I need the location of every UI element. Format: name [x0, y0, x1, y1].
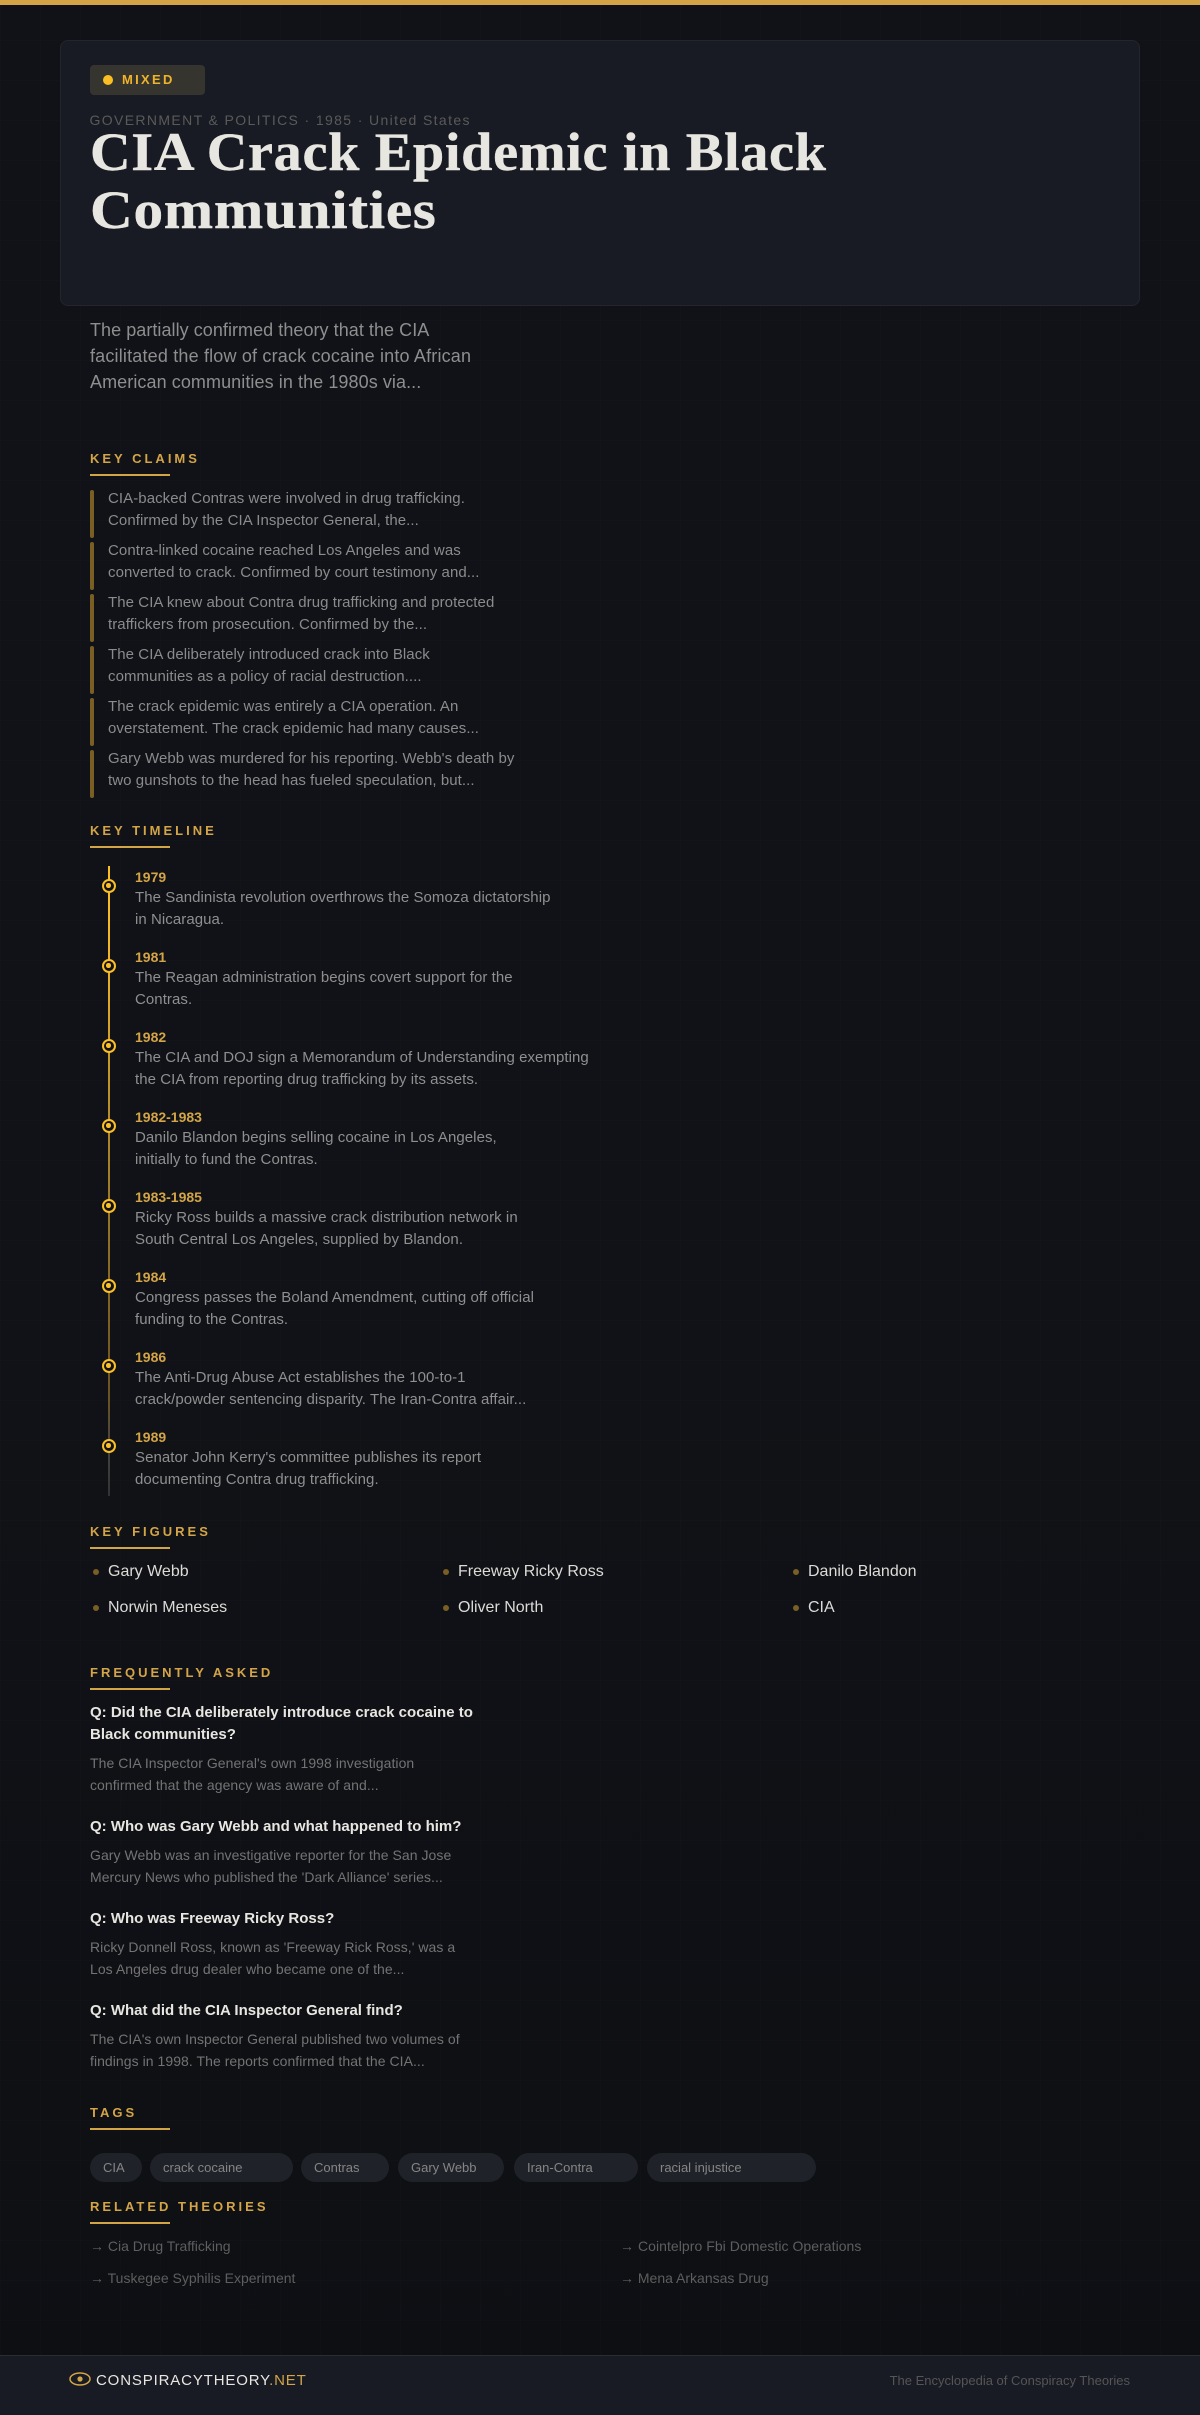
- claim 5: overstatement. The crack epidemic had many causes...: [108, 720, 479, 737]
- heading: related theories: RELATED THEORIES: [90, 2199, 268, 2214]
- year: 1982-1983: [135, 1109, 202, 1125]
- node marker: [102, 879, 116, 893]
- event text: [135, 1289, 534, 1328]
- node marker: [102, 1119, 116, 1133]
- link: Tuskegee Syphilis Experiment: → Tuskegee Syphilis Experiment: [90, 2270, 295, 2286]
- panel: key figures: [90, 1524, 917, 1616]
- event 1981: [102, 949, 513, 1008]
- claim 1: Confirmed by the CIA Inspector General, the...: [108, 512, 419, 529]
- event 1982: [102, 1029, 589, 1088]
- tag: Contras: [301, 2153, 389, 2182]
- top accent bar: [0, 0, 1200, 5]
- answer 3: [90, 1939, 456, 1977]
- answer 2: [90, 1847, 451, 1885]
- figure: Danilo Blandon: Danilo Blandon: [808, 1563, 917, 1580]
- claim 6: [90, 750, 514, 798]
- category and date line: GOVERNMENT & POLITICS · 1985 · United States: [90, 112, 471, 128]
- panel: frequently asked: [90, 1665, 473, 2069]
- question 2: Q: Who was Gary Webb and what happened to him?: [90, 1818, 461, 1835]
- event text: Congress passes the Boland Amendment, cutting off official: [135, 1289, 534, 1306]
- tag row: [90, 2153, 816, 2182]
- claim 3: traffickers from prosecution. Confirmed by the...: [108, 616, 427, 633]
- description: American communities in the 1980s via...: [90, 372, 421, 392]
- event 1979: [102, 869, 550, 928]
- claim 1: CIA-backed Contras were involved in drug trafficking.: [108, 490, 465, 507]
- footer: [0, 2355, 1200, 2415]
- claim 5: The crack epidemic was entirely a CIA operation. An: [108, 698, 458, 715]
- answer 2: Gary Webb was an investigative reporter for the San Jose: [90, 1847, 451, 1863]
- answer 1: confirmed that the agency was aware of and...: [90, 1777, 379, 1793]
- answer 4: [90, 2031, 460, 2069]
- tag: Gary Webb: Gary Webb: [411, 2160, 477, 2175]
- heading: frequently asked: FREQUENTLY ASKED: [90, 1665, 273, 1680]
- answer 3: Ricky Donnell Ross, known as 'Freeway Rick Ross,' was a: [90, 1939, 455, 1955]
- timeline axis line: [108, 866, 110, 1496]
- figure: Freeway Ricky Ross: Freeway Ricky Ross: [458, 1563, 604, 1580]
- link: Cia Drug Trafficking: → Cia Drug Trafficking: [90, 2238, 231, 2254]
- node marker: [102, 1199, 116, 1213]
- year: 1981: [135, 949, 166, 965]
- heading: tags: TAGS: [90, 2105, 137, 2120]
- claim 6: two gunshots to the head has fueled speculation, but...: [108, 772, 475, 789]
- tag: racial injustice: [647, 2153, 816, 2182]
- footer tagline: The Encyclopedia of Conspiracy Theories: [890, 2373, 1130, 2388]
- answer 2: Mercury News who published the 'Dark Alliance' series...: [90, 1869, 443, 1885]
- tag: CIA: [90, 2153, 142, 2182]
- event text: [135, 1369, 526, 1408]
- panel: hero header: [60, 40, 1140, 306]
- tag: Gary Webb: [398, 2153, 504, 2182]
- year: 1983-1985: [135, 1189, 202, 1205]
- tag: racial injustice: racial injustice: [660, 2160, 742, 2175]
- event text: in Nicaragua.: [135, 911, 224, 928]
- claim 3: The CIA knew about Contra drug trafficking and protected: [108, 594, 494, 611]
- figure: Norwin Meneses: Norwin Meneses: [108, 1599, 227, 1616]
- link: Mena Arkansas Drug: → Mena Arkansas Drug: [620, 2270, 769, 2286]
- title: [90, 122, 826, 240]
- claim 4: The CIA deliberately introduced crack into Black: [108, 646, 430, 663]
- heading: key claims: KEY CLAIMS: [90, 451, 200, 466]
- claim 5: [90, 698, 479, 746]
- event text: Contras.: [135, 991, 192, 1008]
- answer 4: The CIA's own Inspector General published two volumes of: [90, 2031, 460, 2047]
- tag: crack cocaine: crack cocaine: [163, 2160, 242, 2175]
- event text: The Reagan administration begins covert support for the: [135, 969, 513, 986]
- event text: The Anti-Drug Abuse Act establishes the 100-to-1: [135, 1369, 466, 1386]
- event text: Senator John Kerry's committee publishes its report: [135, 1449, 481, 1466]
- description: The partially confirmed theory that the CIA: [90, 320, 429, 340]
- event 1984: [102, 1269, 534, 1328]
- link: Cointelpro Fbi Domestic Operations: → Cointelpro Fbi Domestic Operations: [620, 2238, 861, 2254]
- answer 1: [90, 1755, 414, 1793]
- year: 1982: [135, 1029, 166, 1045]
- description: facilitated the flow of crack cocaine into African: [90, 346, 471, 366]
- brand name: CONSPIRACYTHEORY.NET: [96, 2372, 307, 2389]
- event text: The CIA and DOJ sign a Memorandum of Understanding exempting: [135, 1049, 589, 1066]
- tag: Contras: Contras: [314, 2160, 360, 2175]
- node marker: [102, 1279, 116, 1293]
- event text: crack/powder sentencing disparity. The Iran-Contra affair...: [135, 1391, 526, 1408]
- question 1: [90, 1704, 473, 1743]
- figure: Gary Webb: Gary Webb: [108, 1563, 189, 1580]
- heading: key figures: KEY FIGURES: [90, 1524, 211, 1539]
- year: 1989: [135, 1429, 166, 1445]
- event text: [135, 1049, 589, 1088]
- panel: related theories: [90, 2197, 990, 2289]
- node marker: [102, 1439, 116, 1453]
- event 1983-1985: [102, 1189, 518, 1248]
- event 1982-1983: [102, 1109, 497, 1168]
- event text: [135, 1129, 497, 1168]
- claim 4: communities as a policy of racial destruction....: [108, 668, 422, 685]
- answer 1: The CIA Inspector General's own 1998 investigation: [90, 1755, 414, 1771]
- event text: Danilo Blandon begins selling cocaine in Los Angeles,: [135, 1129, 497, 1146]
- node marker: [102, 1039, 116, 1053]
- heading: key timeline: KEY TIMELINE: [90, 823, 217, 838]
- badge label: MIXED: [122, 72, 175, 86]
- year: 1979: [135, 869, 166, 885]
- panel: tags: [90, 2105, 816, 2182]
- node marker: [102, 1359, 116, 1373]
- event 1986: [102, 1349, 526, 1408]
- claim 2: [90, 542, 480, 590]
- panel: key claims: [90, 451, 514, 798]
- question 1: Q: Did the CIA deliberately introduce crack cocaine to: [90, 1704, 473, 1721]
- tag: CIA: CIA: [103, 2160, 125, 2175]
- year: 1986: [135, 1349, 166, 1365]
- event text: [135, 1209, 518, 1248]
- event text: The Sandinista revolution overthrows the Somoza dictatorship: [135, 889, 550, 906]
- tag: Iran-Contra: [514, 2153, 638, 2182]
- event text: initially to fund the Contras.: [135, 1151, 318, 1168]
- event text: South Central Los Angeles, supplied by Blandon.: [135, 1231, 463, 1248]
- node marker: [102, 959, 116, 973]
- title: CIA Crack Epidemic in Black: [90, 122, 826, 182]
- panel: key timeline: [90, 823, 589, 1496]
- tag: Iran-Contra: Iran-Contra: [527, 2160, 593, 2175]
- title: Communities: [90, 180, 436, 240]
- answer 4: findings in 1998. The reports confirmed that the CIA...: [90, 2053, 425, 2069]
- question 4: Q: What did the CIA Inspector General find?: [90, 2002, 403, 2019]
- answer 3: Los Angeles drug dealer who became one of the...: [90, 1961, 405, 1977]
- description: [90, 320, 471, 392]
- event text: Ricky Ross builds a massive crack distribution network in: [135, 1209, 518, 1226]
- event text: [135, 889, 550, 928]
- year: 1984: [135, 1269, 166, 1285]
- claim 4: [90, 646, 430, 694]
- claim 1: [90, 490, 465, 538]
- event 1989: [102, 1429, 481, 1488]
- badge: mixed verdict: [90, 64, 204, 94]
- claim 2: converted to crack. Confirmed by court testimony and...: [108, 564, 480, 581]
- claim 2: Contra-linked cocaine reached Los Angeles and was: [108, 542, 461, 559]
- event text: funding to the Contras.: [135, 1311, 288, 1328]
- claim 3: [90, 594, 494, 642]
- figure: Oliver North: Oliver North: [458, 1599, 543, 1616]
- icon: status dot: [102, 74, 112, 84]
- event text: the CIA from reporting drug trafficking by its assets.: [135, 1071, 478, 1088]
- event text: [135, 1449, 481, 1488]
- question 1: Black communities?: [90, 1726, 236, 1743]
- question 3: Q: Who was Freeway Ricky Ross?: [90, 1910, 334, 1927]
- claim 6: Gary Webb was murdered for his reporting. Webb's death by: [108, 750, 514, 767]
- tag: crack cocaine: [150, 2153, 293, 2182]
- event text: documenting Contra drug trafficking.: [135, 1471, 379, 1488]
- figure: CIA: CIA: [808, 1599, 835, 1616]
- icon: eye logo: [69, 2372, 91, 2386]
- event text: [135, 969, 513, 1008]
